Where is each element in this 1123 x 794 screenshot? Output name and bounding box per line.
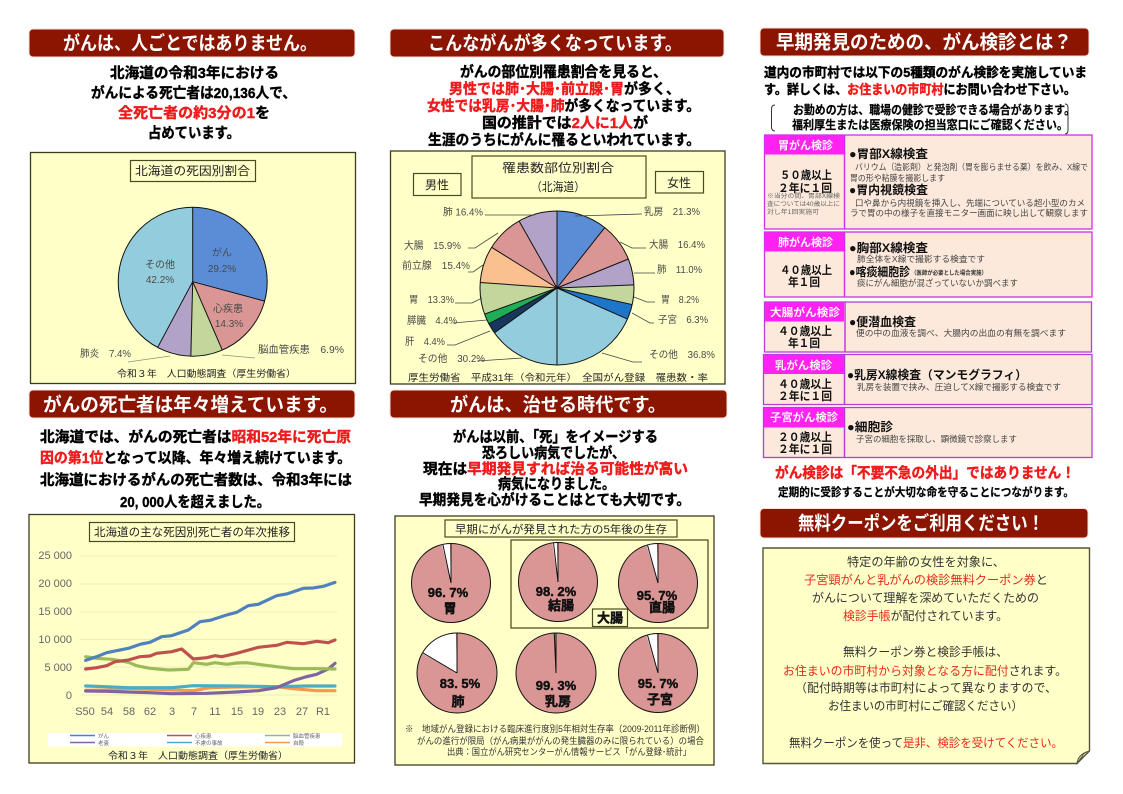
row: lung screening: 肺全体をX線で撮影する検査です — [857, 254, 985, 264]
pie: breast 99.3% — [516, 633, 596, 713]
line chart: deaths by cause: S50 — [75, 706, 95, 718]
note: coupon details: 検診手帳が配付されています。 — [843, 608, 1008, 623]
text block: deaths intro — [91, 64, 296, 142]
row: lung screening: 肺がん検診 — [778, 235, 833, 249]
text block: trend intro — [40, 428, 352, 511]
pie labels: その他 — [145, 258, 175, 271]
row: breast screening — [764, 354, 1092, 404]
chart panel: death causes pie — [30, 152, 356, 384]
pie labels and leaders: 胃 13.3% — [409, 294, 454, 306]
chart legend: 脳血管疾患 — [293, 732, 321, 740]
pie: lung 83.5% — [417, 633, 497, 713]
row: lung screening: 痰にがん細胞が混ざっていないか調べます — [857, 278, 1018, 288]
row: stomach screening: ５０歳以上 — [780, 168, 832, 182]
chart legend: 心疾患 — [195, 732, 212, 740]
row: stomach screening: 胃がん検診 — [778, 138, 833, 152]
pie: rectum 95.7%: 直腸 — [649, 600, 675, 615]
text block: trend intro: 北海道では、がんの死亡者は昭和52年に死亡原 — [40, 428, 351, 446]
heading: use coupons — [760, 508, 1088, 538]
pie: lung 83.5%: 肺 — [451, 694, 465, 709]
line chart: deaths by cause: 15 000 — [38, 606, 72, 618]
chart panel: line chart — [29, 514, 354, 763]
text block: survival intro: がんは以前、「死」をイメージする — [453, 428, 658, 446]
line chart: deaths by cause: 19 — [252, 706, 264, 718]
row: stomach screening: ※当分の間、胃部X線検 — [767, 192, 840, 200]
line chart: deaths by cause: 58 — [123, 706, 135, 718]
row: breast screening: ４０歳以上 — [778, 377, 832, 391]
row: stomach screening: 胃の形や粘膜を撮影します — [850, 173, 945, 183]
row: stomach screening: ラで胃の中の様子を直接モニター画面に映し出して観察します — [850, 208, 1088, 218]
chart panel: incidence pie — [390, 151, 725, 384]
row: lung screening: ４０歳以上 — [780, 263, 832, 277]
row: lung screening: 年１回 — [788, 275, 820, 289]
row: lung screening: （医師が必要とした場合実施） — [911, 269, 987, 277]
pie labels: 脳血管疾患 6.9% — [258, 343, 344, 356]
pie: breast 99.3%: 乳房 — [545, 694, 571, 709]
text block: deaths intro: 北海道の令和3年における — [110, 64, 279, 82]
chart title — [130, 160, 256, 182]
text block: trend intro: 20, 000人を超えました。 — [120, 493, 270, 511]
label: female — [656, 172, 704, 193]
callout: screening is essential: 定期的に受診することが大切な命を守ることにつながります。 — [778, 485, 1074, 499]
text block: incidence intro — [427, 63, 700, 149]
pie labels and leaders: 肺 11.0% — [657, 264, 702, 276]
pie labels: 42.2% — [146, 275, 174, 286]
heading: curable era — [390, 390, 727, 418]
chart legend: 老衰 — [98, 739, 110, 747]
row: cervical screening: ●細胞診 — [847, 419, 893, 434]
colon group box — [511, 540, 708, 628]
line chart: deaths by cause: 11 — [209, 706, 221, 718]
text block: screening intro: 道内の市町村では以下の5種類のがん検診を実施していま — [764, 65, 1087, 80]
heading: common cancers: こんながんが多くなっています。 — [428, 32, 682, 54]
pie labels and leaders: 胃 8.2% — [661, 294, 699, 306]
pie labels: がん — [212, 246, 232, 259]
note: coupon details — [763, 548, 1090, 764]
row: cervical screening: 子宮の細胞を採取し、顕微鏡で診察します — [856, 434, 1017, 444]
pie: stomach 96.7%: 96. 7% — [428, 585, 469, 600]
pie: rectum 95.7%: 95. 7% — [637, 588, 678, 603]
row: colorectal screening: 便の中の血液を調べ、大腸内の出血の有無を調べます — [856, 328, 1066, 338]
line chart: deaths by cause: 3 — [169, 706, 175, 718]
label: male — [414, 174, 461, 196]
text block: deaths intro: 全死亡者の約3分の1 を — [118, 104, 270, 122]
pie labels and leaders: 肺 16.4% — [443, 206, 483, 218]
note: coupon details: 無料クーポン券と検診手帳は、 — [843, 644, 1008, 659]
text block: survival intro: 早期発見を心がけることはとても大切です。 — [419, 491, 690, 509]
heading: use coupons: 無料クーポンをご利用ください！ — [798, 512, 1044, 534]
label: large intestine: 大腸 — [597, 610, 623, 626]
heading: common cancers — [390, 29, 724, 57]
note: coupon details: がんについて理解を深めていただくための — [812, 590, 1039, 605]
row: cervical screening — [764, 407, 1092, 458]
row: stomach screening: 口や鼻から内視鏡を挿入し、先端についている超小型のカメ — [855, 198, 1085, 208]
chart legend: 不慮の事故 — [195, 739, 223, 747]
note: coupon details: 無料クーポンを使って是非、検診を受けてください。 — [789, 735, 1063, 750]
pie labels and leaders: その他 36.8% — [649, 348, 715, 361]
label: male: 男性 — [425, 178, 449, 192]
workplace note with brackets: 福利厚生または医療保険の担当窓口にご確認ください。 — [792, 117, 1068, 132]
row: breast screening: 乳がん検診 — [775, 358, 832, 372]
row: stomach screening: ２年に１回 — [778, 181, 832, 195]
panel: screening — [760, 28, 1092, 499]
text block: deaths intro: 占めています。 — [148, 125, 240, 142]
pie labels: 29.2% — [208, 264, 236, 275]
row: lung screening: ●喀痰細胞診 — [849, 264, 910, 279]
label: female: 女性 — [667, 176, 691, 190]
line chart: deaths by cause: 27 — [296, 706, 308, 718]
row: breast screening: ●乳房X線検査（マンモグラフィ） — [847, 367, 1027, 382]
pie labels and leaders: 前立腺 15.4% — [402, 259, 470, 272]
chart legend: 自殺 — [293, 739, 305, 747]
source note: 厚生労働省 平成31年（令和元年） 全国がん登録 罹患数・率 — [408, 372, 708, 384]
source note: 令和３年 人口動態調査（厚生労働省） — [108, 750, 288, 762]
pie: colon 98.2%: 98. 2% — [536, 584, 577, 599]
line chart: deaths by cause: 25 000 — [38, 550, 72, 562]
pie labels and leaders — [402, 206, 715, 365]
pie chart: causes of death — [118, 207, 267, 356]
note: coupon details: 特定の年齢の女性を対象に、 — [847, 554, 1005, 569]
pie: breast 99.3%: 99. 3% — [536, 678, 577, 693]
chart panel: five-year survival — [395, 516, 714, 765]
line chart: deaths by cause — [38, 550, 337, 718]
footnote — [405, 723, 705, 757]
heading: deaths increase — [29, 390, 355, 418]
pie: stomach 96.7% — [412, 544, 490, 622]
text block: incidence intro: 男性では肺･大腸･前立腺･胃が多く、 — [449, 80, 680, 98]
row: breast screening: ２年に１回 — [778, 389, 832, 403]
note: coupon details: お住まいの市町村から対象となる方に配付されます。 — [783, 663, 1067, 678]
row: lung screening — [764, 232, 1092, 297]
text block: screening intro: す。詳しくは、お住まいの市町村にお問い合わせ下さい。 — [764, 82, 1076, 97]
pie: uterus 95.7%: 子宮 — [647, 692, 673, 707]
pie: stomach 96.7%: 胃 — [443, 601, 457, 616]
panel: deaths trend — [29, 390, 355, 763]
row: stomach screening: 査については40歳以上に — [767, 200, 840, 208]
chart title: 早期にがんが発見された方の5年後の生存 — [455, 522, 667, 536]
row: colorectal screening: ●便潜血検査 — [849, 314, 916, 329]
text block: survival intro — [419, 428, 690, 509]
pie: colon 98.2% — [518, 542, 598, 622]
row: cervical screening: ２０歳以上 — [778, 430, 832, 444]
line chart: deaths by cause: 10 000 — [38, 634, 72, 646]
row: colorectal screening: 大腸がん検診 — [770, 305, 840, 319]
text block: screening intro — [764, 65, 1087, 97]
chart title — [90, 522, 294, 542]
row: colorectal screening: 年１回 — [788, 336, 820, 350]
callout: screening is essential: がん検診は「不要不急の外出」ではありません！ — [775, 464, 1075, 482]
text block: trend intro: 北海道におけるがんの死亡者数は、令和3年には — [40, 471, 352, 489]
pie labels and leaders: 肝 4.4% — [405, 336, 445, 348]
text block: trend intro: 因の第1位となって以降、年々増え続けています。 — [40, 449, 351, 467]
row: stomach screening — [764, 135, 1092, 229]
pie: uterus 95.7% — [618, 634, 698, 712]
label: large intestine — [592, 609, 628, 626]
workplace note with brackets — [772, 102, 1075, 134]
pie labels: 肺炎 7.4% — [80, 348, 131, 360]
row: colorectal screening — [764, 302, 1092, 352]
row: colorectal screening: ４０歳以上 — [778, 324, 832, 338]
line chart: deaths by cause: 20 000 — [38, 578, 72, 590]
text block: incidence intro: 生涯のうちにがんに罹るといわれています。 — [428, 131, 700, 149]
pie labels and leaders: 膵臓 4.4% — [407, 314, 457, 327]
row: lung screening: ●胸部X線検査 — [849, 240, 928, 255]
pie: lung 83.5%: 83. 5% — [440, 676, 481, 691]
pie labels and leaders: その他 30.2% — [418, 352, 485, 365]
pie labels and leaders: 子宮 6.3% — [658, 313, 708, 326]
text block: incidence intro: 女性では乳房･大腸･肺が多くなっています。 — [427, 97, 700, 115]
text block: survival intro: 現在は早期発見すれば治る可能性が高い — [423, 460, 688, 478]
row: stomach screening: バリウム（造影剤）と発泡剤（胃を膨らませる薬）を飲み、X線で — [855, 162, 1088, 172]
line chart: deaths by cause: 0 — [66, 690, 72, 702]
pie: uterus 95.7%: 95. 7% — [638, 676, 679, 691]
chart legend: がん — [98, 732, 110, 740]
heading: what is screening: 早期発見のための、がん検診とは？ — [776, 30, 1072, 54]
panel: survival — [390, 390, 727, 765]
pie labels and leaders: 乳房 21.3% — [644, 206, 700, 218]
workplace note with brackets: お勤めの方は、職場の健診で受診できる場合があります。 — [793, 102, 1075, 117]
footnote: 出典：国立がん研究センターがん情報サービス「がん登録･統計」 — [447, 746, 691, 757]
chart title: 北海道の主な死因別死亡者の年次推移 — [94, 525, 290, 539]
text block: incidence intro: がんの部位別罹患割合を見ると、 — [460, 63, 667, 81]
callout: screening is essential — [775, 464, 1075, 499]
chart title: 北海道の死因別割合 — [135, 164, 250, 178]
pie labels — [80, 246, 344, 362]
row: stomach screening: 対し年1回実施可 — [767, 208, 819, 216]
panel: incidence by site — [390, 29, 725, 384]
note: coupon details: 子宮頸がんと乳がんの検診無料クーポン券 と — [804, 572, 1048, 587]
row: stomach screening: ●胃内視鏡検査 — [849, 182, 928, 197]
heading: what is screening — [760, 28, 1089, 56]
panel: deaths share — [29, 29, 356, 384]
heading: curable era: がんは、治せる時代です。 — [450, 393, 666, 416]
pie: rectum 95.7% — [618, 544, 698, 622]
footnote: がんの進行が限局（がん病巣ががんの発生臓器のみに限られている）の場合 — [417, 735, 704, 746]
chart title — [445, 520, 677, 537]
icon: folded corner — [1077, 751, 1090, 764]
pie labels: 心疾患 — [213, 303, 243, 315]
heading: not someone else's problem: がんは、人ごとではありません。 — [63, 32, 317, 54]
line chart: deaths by cause: R1 — [316, 706, 330, 718]
line chart: deaths by cause: 5 000 — [44, 662, 72, 674]
line chart: deaths by cause: 23 — [274, 706, 286, 718]
chart title — [472, 156, 646, 198]
text block: deaths intro: がんによる死亡者は20,136人で、 — [91, 84, 296, 102]
pie chart: incidence by site — [480, 211, 634, 365]
chart legend — [48, 732, 342, 747]
note: coupon details: （配付時期等は市町村によって異なりますので、 — [795, 681, 1057, 695]
pie labels: 14.3% — [215, 319, 243, 330]
row: cervical screening: ２年に１回 — [778, 442, 832, 456]
pie labels and leaders: 大腸 15.9% — [404, 239, 461, 252]
source note: 令和３年 人口動態調査（厚生労働省） — [117, 368, 296, 380]
heading: not someone else's problem — [29, 29, 355, 57]
line chart: deaths by cause: 62 — [144, 706, 156, 718]
text block: incidence intro: 国の推計では2人に1人が — [482, 114, 649, 132]
heading: deaths increase: がんの死亡者は年々増えています。 — [43, 393, 338, 416]
line chart: deaths by cause: 15 — [231, 706, 243, 718]
row: breast screening: 乳房を装置で挟み、圧迫してX線で撮影する検査です — [857, 382, 1061, 392]
line chart: deaths by cause: 7 — [191, 706, 197, 718]
footnote: ※ 地域がん登録における臨床進行度別5年相対生存率（2009-2011年診断例） — [405, 723, 705, 734]
chart title: （北海道） — [531, 180, 585, 194]
pie labels and leaders: 大腸 16.4% — [649, 238, 705, 251]
chart title: 罹患数部位別割合 — [502, 160, 614, 175]
line chart: deaths by cause: 54 — [101, 706, 113, 718]
row: stomach screening: ●胃部X線検査 — [849, 146, 928, 161]
panel: free coupon — [760, 508, 1090, 764]
text block: survival intro: 病気になりました。 — [498, 475, 615, 493]
row: cervical screening: 子宮がん検診 — [770, 410, 838, 424]
pie: colon 98.2%: 結腸 — [548, 598, 574, 613]
note: coupon details: お住まいの市町村にご確認ください） — [828, 698, 1023, 713]
text block: survival intro: 恐ろしい病気でしたが、 — [482, 444, 625, 462]
